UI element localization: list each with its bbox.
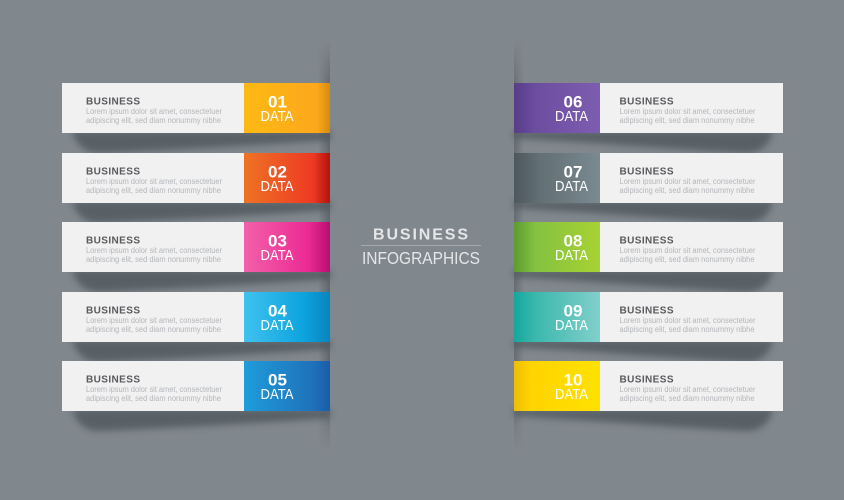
panel: item 04: 04 [268, 302, 287, 320]
panel: item 01: Lorem ipsum dolor sit amet, consectetuer [86, 107, 222, 116]
panel: item 04: Lorem ipsum dolor sit amet, consectetuer [86, 316, 222, 325]
panel: item 10: DATA [555, 386, 588, 403]
panel: item 09: 09 [564, 302, 582, 320]
panel: item 02: BUSINESS [86, 166, 140, 178]
panel: item 10: Lorem ipsum dolor sit amet, consectetuer [620, 385, 756, 394]
panel: item 08: Lorem ipsum dolor sit amet, consectetuer [620, 246, 756, 255]
panel: item 01: BUSINESS [86, 96, 140, 108]
panel: item 05 [62, 361, 330, 411]
panel: item 07: adipiscing elit, sed diam nonummy nibhe [620, 186, 754, 195]
panel: item 03: DATA [260, 247, 294, 264]
panel: item 04: DATA [260, 317, 294, 334]
panel: item 04: BUSINESS [86, 306, 140, 316]
panel: item 08: adipiscing elit, sed diam nonummy nibhe [620, 255, 754, 264]
right bar shadows [514, 131, 773, 431]
panel: item 04: adipiscing elit, sed diam nonummy nibhe [86, 325, 221, 334]
panel: item 06: Lorem ipsum dolor sit amet, consectetuer [620, 107, 756, 116]
panel: item 03: 03 [268, 232, 287, 250]
panel: item 08 [514, 222, 783, 272]
panel: item 07: 07 [564, 162, 582, 182]
fold shadows [318, 40, 524, 450]
panel: item 09: BUSINESS [620, 306, 674, 316]
panel: item 01: DATA [260, 108, 294, 125]
panel: item 02: 02 [268, 162, 287, 182]
panel: item 09: DATA [555, 317, 588, 334]
panel: item 10: adipiscing elit, sed diam nonummy nibhe [620, 394, 754, 403]
panel: item 02: Lorem ipsum dolor sit amet, consectetuer [86, 177, 222, 186]
panel: item 06: BUSINESS [620, 96, 674, 108]
panel: item 02: adipiscing elit, sed diam nonummy nibhe [86, 186, 221, 195]
panel: item 05: DATA [260, 386, 294, 403]
panel: item 03 [62, 222, 330, 272]
title [361, 226, 481, 268]
panel: item 02 [62, 153, 330, 203]
panel: item 06: adipiscing elit, sed diam nonummy nibhe [620, 116, 754, 125]
left bar shadows [72, 131, 330, 431]
panel: item 08: BUSINESS [620, 236, 674, 246]
panel: item 10: BUSINESS [620, 374, 674, 386]
panel: item 05: Lorem ipsum dolor sit amet, consectetuer [86, 385, 222, 394]
panel: item 01 [62, 83, 330, 133]
panel: item 05: adipiscing elit, sed diam nonummy nibhe [86, 394, 221, 403]
panel: item 09: adipiscing elit, sed diam nonummy nibhe [620, 325, 754, 334]
panel: item 02: DATA [260, 178, 294, 195]
panel: item 01: adipiscing elit, sed diam nonummy nibhe [86, 116, 221, 125]
panel: item 03: BUSINESS [86, 236, 140, 246]
panel: item 10 [514, 361, 783, 411]
panel: item 09: Lorem ipsum dolor sit amet, consectetuer [620, 316, 756, 325]
panel: item 06: DATA [555, 108, 588, 125]
title: BUSINESS [373, 226, 468, 244]
panel: item 09 [514, 292, 783, 342]
panel: item 08: DATA [555, 247, 588, 264]
panel: item 03: adipiscing elit, sed diam nonummy nibhe [86, 255, 221, 264]
panel: item 05: 05 [268, 370, 287, 390]
panel: item 10: 10 [564, 370, 582, 390]
panel: item 07: BUSINESS [620, 166, 674, 178]
panel: item 06: 06 [564, 92, 582, 112]
panel: item 07 [514, 153, 783, 203]
panel: item 06 [514, 83, 783, 133]
panel: item 04 [62, 292, 330, 342]
panel: item 01: 01 [268, 92, 287, 112]
panel: item 07: Lorem ipsum dolor sit amet, consectetuer [620, 177, 756, 186]
panel: item 05: BUSINESS [86, 374, 140, 386]
title: INFOGRAPHICS [362, 248, 480, 268]
panel: item 03: Lorem ipsum dolor sit amet, consectetuer [86, 246, 222, 255]
panel: item 07: DATA [555, 178, 588, 195]
panel: item 08: 08 [564, 232, 582, 250]
